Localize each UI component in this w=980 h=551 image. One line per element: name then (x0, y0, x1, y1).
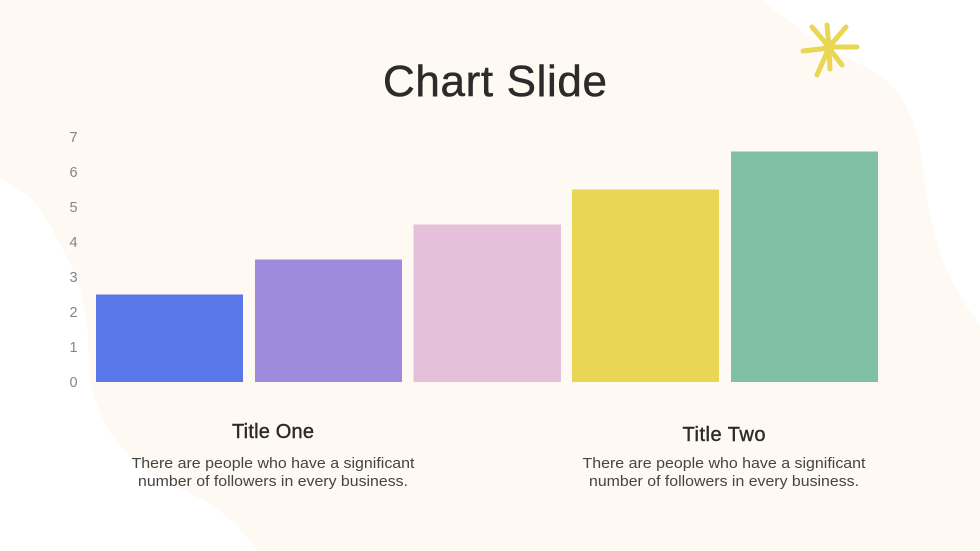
bar 4 yellow (572, 190, 719, 382)
bar 3 pink (414, 224, 561, 382)
text block: title two (582, 424, 866, 490)
body: title one: There are people who have a significant (132, 455, 415, 472)
y axis labels: 3 (69, 270, 78, 286)
bar chart (96, 152, 878, 382)
body: title two: There are people who have a significant (582, 455, 866, 472)
y axis labels: 1 (69, 340, 78, 356)
y axis labels: 7 (69, 130, 78, 146)
heading: title one: Title One (232, 421, 314, 443)
y axis labels: 6 (69, 165, 78, 181)
y axis labels: 5 (69, 200, 78, 216)
bar 2 purple (255, 260, 402, 382)
heading: title two: Title Two (682, 424, 766, 446)
y axis labels: 2 (69, 305, 78, 321)
y axis labels (69, 130, 78, 391)
y axis labels: 4 (69, 235, 78, 251)
title: Chart Slide (383, 57, 607, 106)
text block: title one (132, 421, 415, 490)
bar 5 green (731, 152, 878, 382)
body: title one: number of followers in every business. (138, 473, 408, 490)
y axis labels: 0 (69, 375, 78, 391)
icon: yellow asterisk (803, 25, 857, 75)
body: title one (132, 455, 415, 490)
body: title two (582, 455, 866, 490)
bar 1 blue (96, 294, 243, 382)
body: title two: number of followers in every business. (589, 473, 859, 490)
